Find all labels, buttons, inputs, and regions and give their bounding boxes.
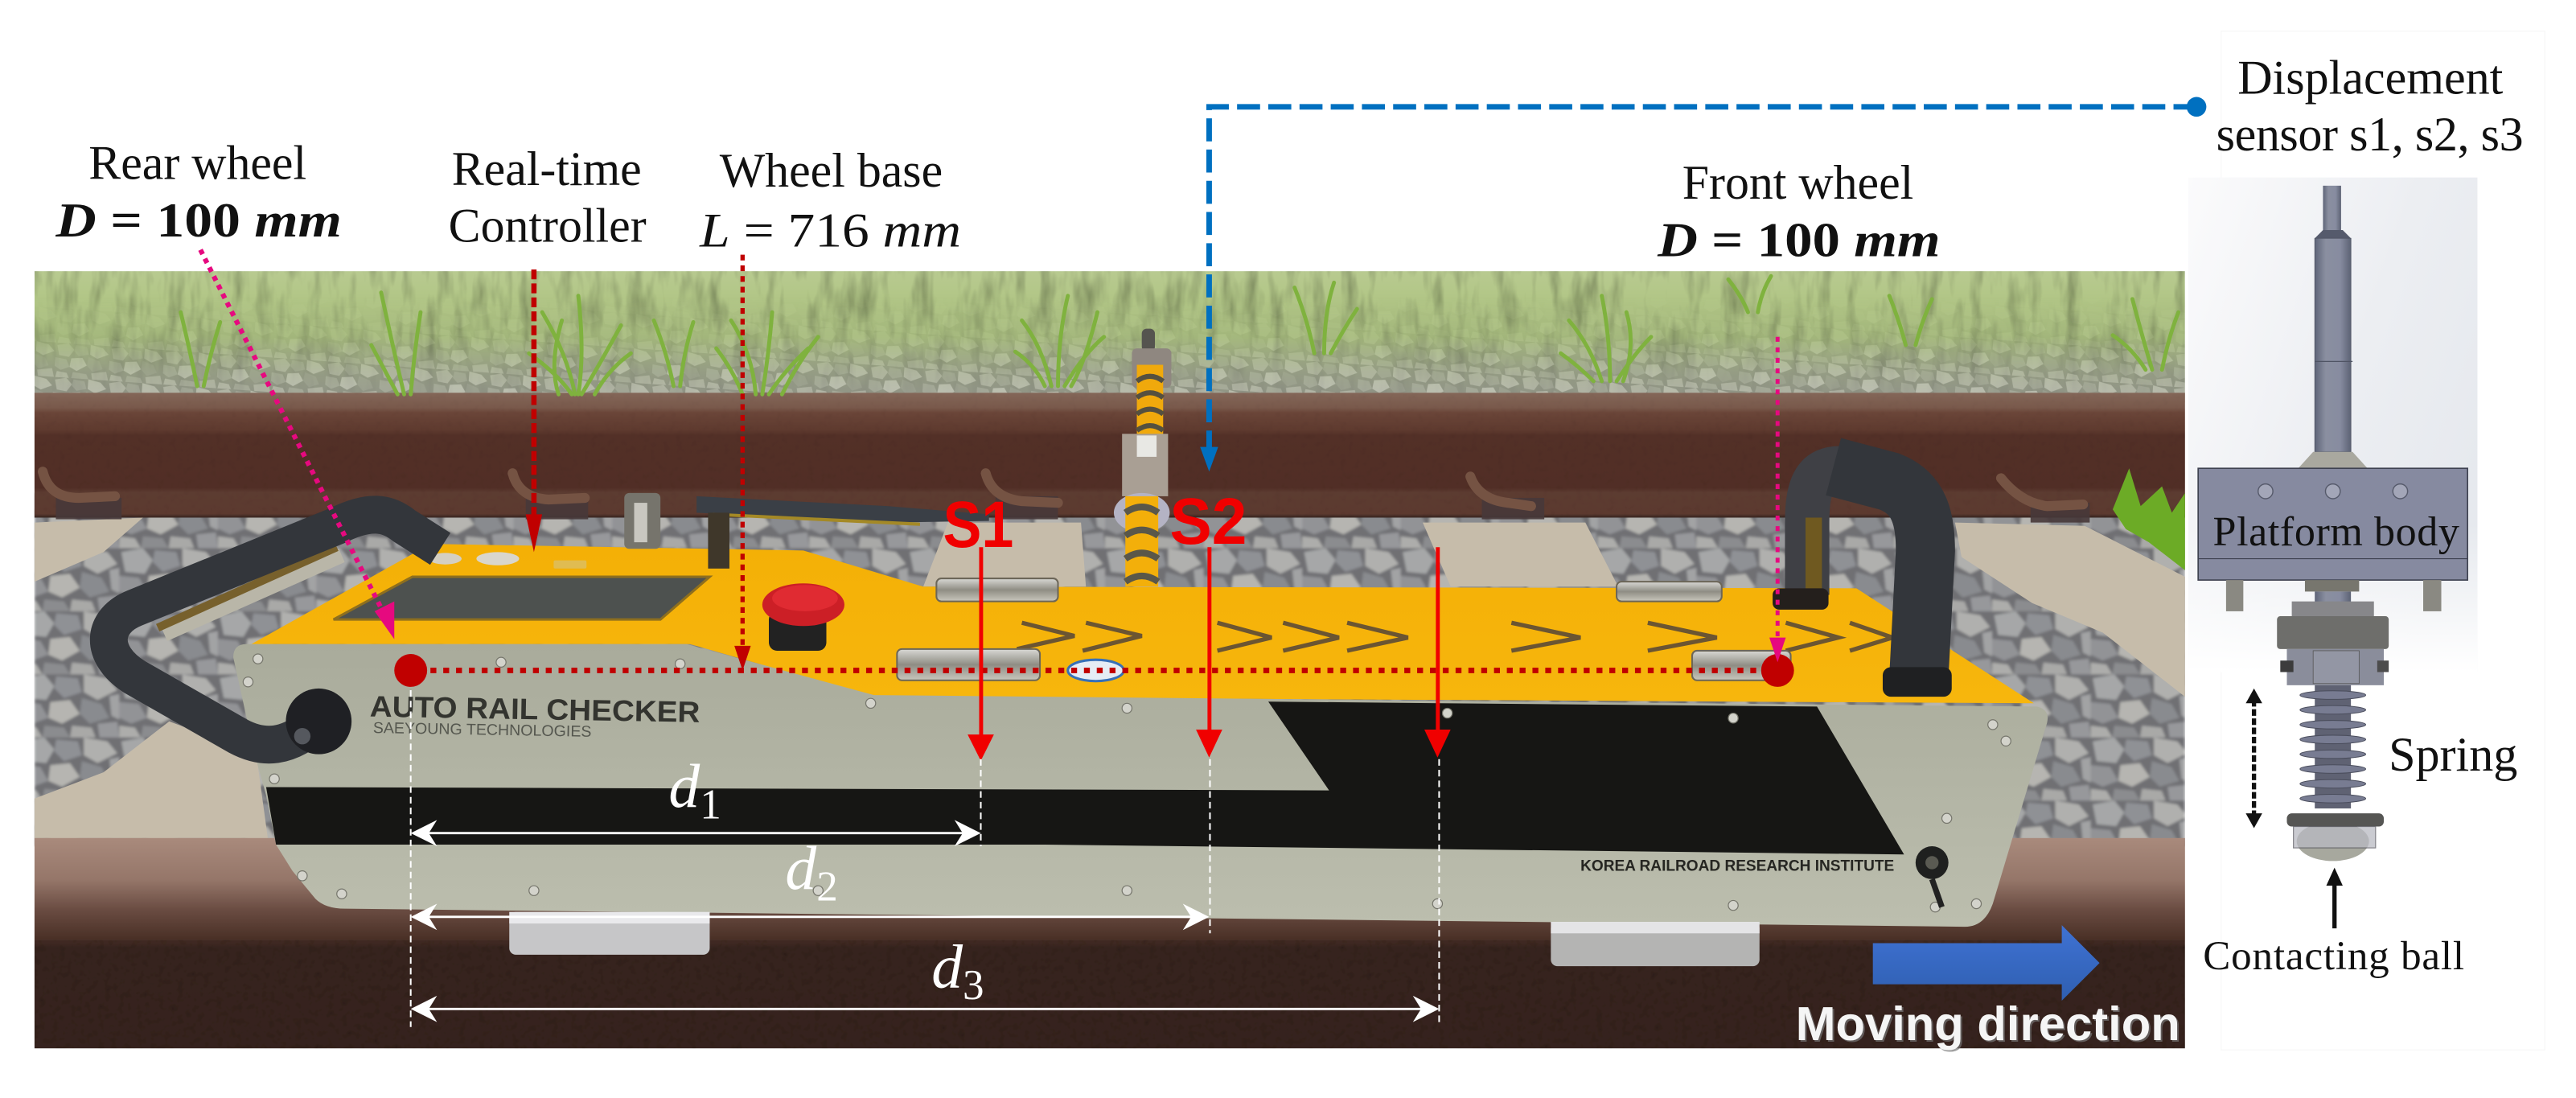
label: spring: Spring	[2389, 727, 2517, 781]
rivets	[243, 654, 2011, 912]
label: rear wheel: Rear wheel	[88, 137, 306, 190]
platform body block: Platform body	[2213, 509, 2459, 555]
label: wheel base: L = 716 mm	[699, 204, 961, 257]
label: moving direction: Moving direction	[1797, 998, 2182, 1052]
label: front wheel: Front wheel	[1682, 156, 1913, 209]
rail clips	[43, 471, 2089, 523]
sensor body drawing	[2297, 186, 2369, 470]
label: d1: d	[668, 751, 700, 820]
label: wheel base	[699, 144, 961, 257]
arrow: S2	[1196, 547, 1222, 758]
label: moving direction: Moving direction	[1796, 997, 2180, 1051]
label: d1: 1	[700, 781, 721, 828]
black stripe and panel	[266, 701, 1904, 854]
chevrons	[1017, 623, 1892, 651]
back rail	[35, 393, 2185, 517]
brand text: KOREA RAILROAD RESEARCH INSTITUTE: KOREA RAILROAD RESEARCH INSTITUTE	[1580, 857, 1894, 875]
arrow: real-time controller pointer	[526, 269, 542, 552]
yellow top deck	[252, 544, 2034, 703]
latches	[897, 578, 1791, 681]
control buttons	[429, 493, 660, 569]
label: front wheel	[1657, 156, 1940, 267]
label: d2: 2	[816, 863, 838, 910]
power port	[1916, 846, 1949, 907]
rear handle	[109, 515, 440, 755]
sensor position arrows	[968, 547, 1451, 761]
label: d2: d	[785, 833, 816, 903]
label: real-time controller	[449, 142, 647, 252]
label: displacement sensor: sensor s1, s2, s3	[2217, 107, 2524, 161]
grass tufts	[181, 276, 2179, 394]
logo badge	[1068, 660, 1124, 681]
lever	[696, 496, 989, 569]
label: front wheel: D = 100 mm	[1657, 214, 1940, 267]
arrow: spring travel	[2245, 689, 2262, 829]
brand text: SAEYOUNG TECHNOLOGIES: SAEYOUNG TECHNOLOGIES	[373, 719, 592, 741]
label: real-time controller: Controller	[449, 199, 647, 252]
label: rear wheel	[55, 137, 342, 247]
spring and contact assembly	[2277, 580, 2389, 861]
arrow: moving direction	[1873, 925, 2100, 1001]
wheel base dotted line with wheel markers	[394, 654, 1794, 687]
label: d3: 3	[963, 962, 984, 1009]
label: S1: S1	[943, 488, 1013, 561]
label: displacement sensor	[2217, 50, 2524, 161]
platform body block	[2198, 468, 2467, 611]
rail pads	[509, 912, 1760, 966]
label: displacement sensor: Displacement	[2237, 50, 2504, 104]
label: S2: S2	[1169, 485, 1247, 558]
label: wheel base: Wheel base	[720, 144, 943, 197]
sleepers	[35, 517, 2185, 838]
display screen	[334, 577, 709, 619]
bright grass at right edge	[2113, 468, 2185, 570]
arrow: rear wheel pointer	[200, 250, 394, 639]
front handle	[1773, 467, 1952, 697]
sensor assembly on rail	[1114, 329, 1171, 586]
arrow: contacting ball	[2327, 868, 2343, 928]
label: rear wheel: D = 100 mm	[55, 194, 342, 247]
label: contacting ball: Contacting ball	[2203, 933, 2464, 979]
distance dimension lines	[411, 690, 1439, 1027]
device body	[109, 467, 2048, 966]
side panel	[233, 644, 2048, 927]
arrow: wheel base pointer	[734, 255, 751, 670]
label: real-time controller: Real-time	[452, 142, 642, 195]
arrow: S3	[1424, 547, 1451, 758]
photo: rail track background	[35, 271, 2185, 1048]
label: d3: d	[931, 932, 963, 1001]
foreground rail	[35, 838, 2185, 1048]
arrow: front wheel pointer	[1769, 337, 1785, 662]
brand text: AUTO RAIL CHECKER: AUTO RAIL CHECKER	[369, 690, 700, 729]
arrow: S1	[968, 547, 994, 761]
panel: displacement sensor detail	[2188, 31, 2545, 1050]
arrow: displacement sensor dashed leader	[1200, 97, 2206, 471]
emergency stop button	[762, 583, 844, 651]
